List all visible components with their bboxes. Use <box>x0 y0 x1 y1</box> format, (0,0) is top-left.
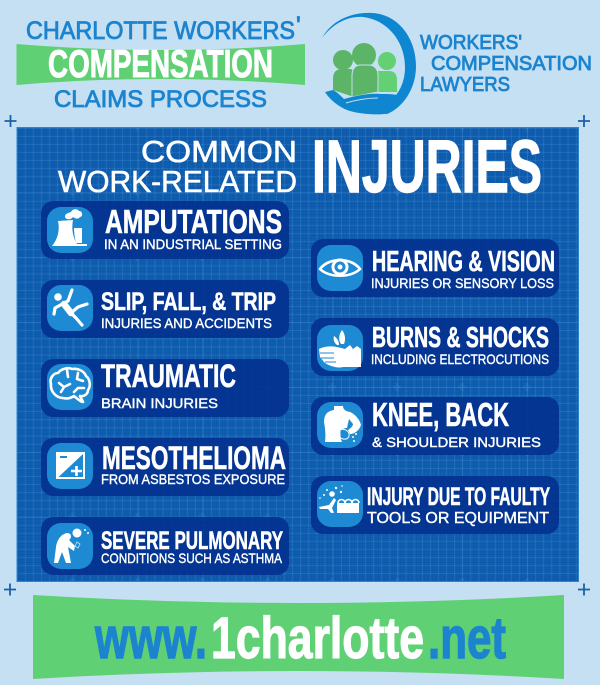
icon: back pain torso <box>317 402 363 448</box>
card title: SEVERE PULMONARY <box>101 527 283 555</box>
icon: falling person <box>47 285 93 331</box>
title line: charlotte workers': CHARLOTTE WORKERS <box>26 17 295 45</box>
logo text: compensation: COMPENSATION <box>431 52 592 75</box>
icon: person with toolbox <box>317 481 363 527</box>
green banner <box>33 595 564 679</box>
card: slip, fall and trip <box>41 280 289 338</box>
card subtitle: INJURIES OR SENSORY LOSS <box>371 275 554 291</box>
card subtitle: BRAIN INJURIES <box>101 395 218 411</box>
logo text: lawyers: LAWYERS <box>420 73 510 96</box>
card title: TRAUMATIC <box>101 358 236 394</box>
card: knee, back and shoulder <box>311 396 559 455</box>
card title: AMPUTATIONS <box>105 203 282 240</box>
card: hearing and vision <box>311 239 559 297</box>
icon: cooling tower factory <box>47 207 93 253</box>
title: charlotte workers' compensation claims process <box>16 12 305 113</box>
logo: workers' compensation lawyers <box>322 13 592 114</box>
title line: claims process: CLAIMS PROCESS <box>54 86 267 113</box>
card: mesothelioma <box>41 438 289 496</box>
card: burns and shocks <box>311 318 559 376</box>
card subtitle: INJURIES AND ACCIDENTS <box>101 315 272 331</box>
title apostrophe: ' <box>296 12 301 40</box>
card subtitle: TOOLS OR EQUIPMENT <box>367 510 550 527</box>
card: traumatic brain injuries <box>41 358 289 417</box>
left worker <box>333 50 354 97</box>
center worker <box>352 43 378 97</box>
card title: KNEE, BACK <box>372 396 509 433</box>
website address <box>94 606 506 671</box>
right worker <box>376 52 397 92</box>
card subtitle: IN AN INDUSTRIAL SETTING <box>104 236 282 252</box>
heading line: common: COMMON <box>141 135 297 169</box>
heading line: work-related: WORK-RELATED <box>58 164 297 199</box>
logo text: workers': WORKERS' <box>420 31 522 54</box>
card: faulty tools or equipment <box>311 476 559 534</box>
icon: person coughing <box>47 523 93 569</box>
blue arc <box>322 13 416 114</box>
card subtitle: & SHOULDER INJURIES <box>372 434 541 450</box>
corner marks <box>4 115 590 596</box>
heading: common work-related injuries <box>58 125 542 208</box>
panel: common work-related injuries <box>16 125 579 582</box>
card: severe pulmonary conditions <box>41 517 289 575</box>
card title: MESOTHELIOMA <box>102 440 286 476</box>
card subtitle: INCLUDING ELECTROCUTIONS <box>371 351 549 367</box>
blue hand <box>325 90 399 114</box>
card subtitle: FROM ASBESTOS EXPOSURE <box>101 471 285 487</box>
icon: brain <box>47 364 93 410</box>
url part: .net: .net <box>428 606 506 671</box>
card subtitle: CONDITIONS SUCH AS ASTHMA <box>101 550 283 566</box>
icon: burned hand <box>317 325 363 371</box>
icon: eye <box>317 245 363 291</box>
title line: compensation: COMPENSATION <box>48 43 273 86</box>
card title: SLIP, FALL, & TRIP <box>101 288 276 316</box>
url part: www.: www. <box>94 606 207 671</box>
green ribbon <box>16 44 305 85</box>
footer banner: website <box>33 595 564 679</box>
logo emblem: hand, arc and workers <box>322 13 416 114</box>
icon: exposure square <box>47 443 93 489</box>
card: amputations <box>41 201 289 259</box>
url part: 1charlotte: 1charlotte <box>211 606 424 671</box>
